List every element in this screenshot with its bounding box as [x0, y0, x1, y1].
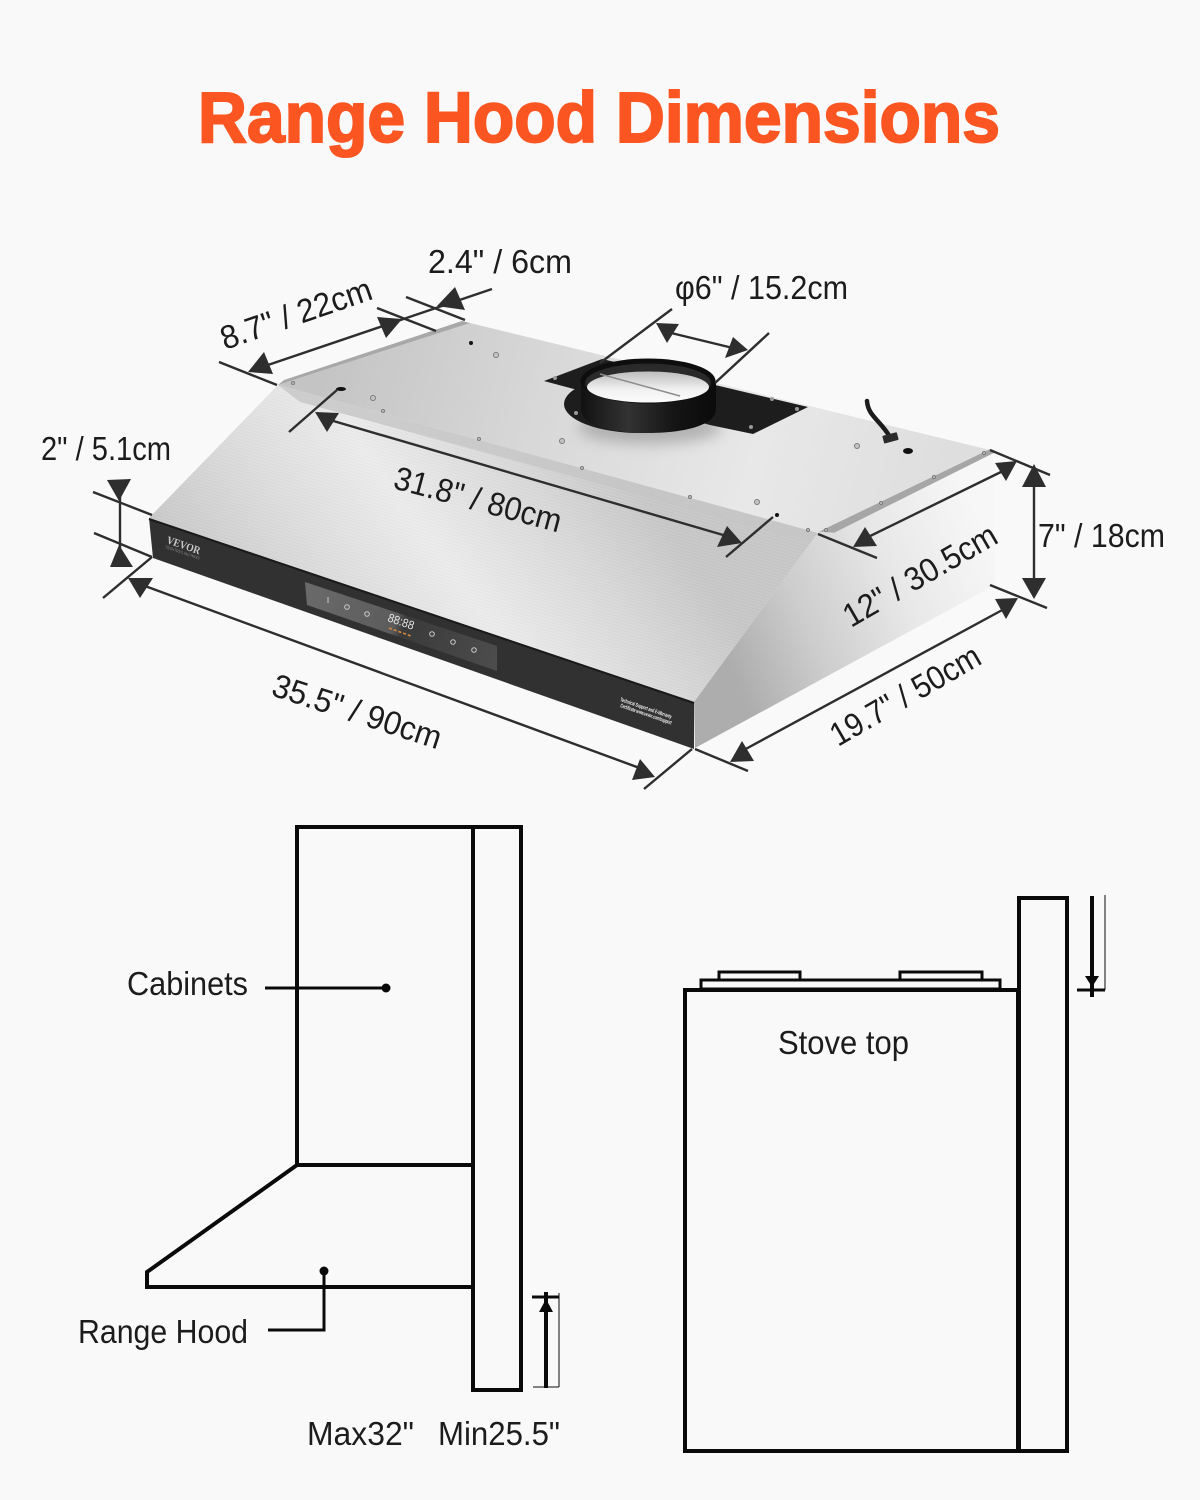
cabinet outline [297, 827, 473, 1165]
dimension lines and arrows [93, 287, 1050, 789]
label: duct diameter: φ6" / 15.2cm [675, 269, 848, 306]
dimension labels [41, 243, 1165, 756]
hood side face [694, 450, 995, 748]
support note: Technical Support and E-Warranty [619, 697, 673, 721]
label: 7in: 7" / 18cm [1038, 517, 1165, 554]
dimension: 2in [93, 479, 152, 567]
hood top panel [278, 323, 990, 533]
label: 12in: 12" / 30.5cm [836, 516, 1003, 634]
hood outline [147, 1165, 473, 1287]
range hood product illustration [149, 321, 995, 749]
label: 8.7in: 8.7" / 22cm [215, 270, 377, 357]
mounting holes [336, 341, 913, 517]
dimension: 31.8in [289, 390, 773, 557]
right burner [900, 972, 982, 980]
support note: Certificate www.vevor.com/support [619, 703, 672, 727]
front seam strip [278, 385, 818, 541]
duct mounting plate [544, 359, 808, 434]
black control strip [149, 518, 694, 749]
installation diagram: side view [147, 827, 559, 1390]
wall [473, 827, 521, 1390]
height arrow [532, 1292, 559, 1388]
dimension: 8.7in and 2.4in flange [219, 287, 492, 385]
stove wall [1019, 898, 1067, 1451]
touch control panel: 88:88 [386, 611, 416, 633]
dimension: 7in [990, 464, 1047, 608]
text: range hood: Range Hood [78, 1313, 248, 1350]
clearance arrow [1077, 895, 1105, 997]
brand logo: VEVOR [165, 534, 203, 558]
dimension: 12in [818, 450, 1050, 558]
text: stove top: Stove top [778, 1024, 909, 1061]
range hood leader [268, 1266, 328, 1330]
text: cabinets: Cabinets [127, 965, 248, 1002]
label: 35.5in: 35.5" / 90cm [268, 666, 447, 756]
touch control panel [305, 582, 497, 671]
dimension: 19.7in [695, 598, 1018, 771]
support note [619, 697, 673, 727]
dimension: duct diameter [600, 309, 769, 383]
installation diagram: stove [685, 895, 1105, 1451]
duct shadow [578, 412, 722, 444]
label: 31.8in: 31.8" / 80cm [390, 459, 566, 539]
power cord [867, 401, 890, 437]
label: 2in: 2" / 5.1cm [41, 430, 171, 467]
label: 2.4in: 2.4" / 6cm [428, 243, 572, 280]
right seam strip [822, 450, 994, 532]
cooktop plate [701, 980, 1000, 989]
dimension: 35.5in [103, 557, 692, 789]
text: max height: Max32" [307, 1415, 414, 1452]
brand tagline: TOUGH TOOLS, HALF PRICES [165, 544, 201, 561]
round duct collar [580, 358, 716, 433]
stove body [685, 990, 1018, 1451]
label: 19.7in: 19.7" / 50cm [823, 637, 987, 753]
cabinets leader [265, 984, 390, 992]
hood front sloped face [149, 385, 818, 702]
cord plug [882, 432, 899, 444]
screws on top panel [292, 352, 986, 532]
text: min height: Min25.5" [438, 1415, 560, 1452]
title: Range Hood Dimensions [198, 79, 1000, 158]
left seam strip [278, 321, 470, 385]
left burner [719, 972, 800, 980]
